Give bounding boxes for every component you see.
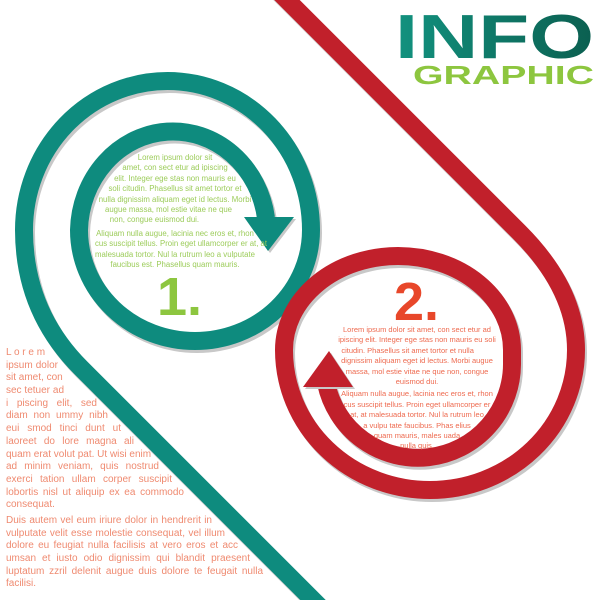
- left text block: vulputate velit esse molestie consequat, vel illum: [6, 528, 225, 539]
- text block 2: a vulpu tate faucibus. Phas elius: [363, 421, 471, 430]
- text block 2: Lorem ipsum dolor sit amet, con sect etur ad: [343, 325, 491, 334]
- title: GRAPHIC: [413, 60, 594, 90]
- left text block: diam non ummy nibh: [6, 410, 108, 421]
- left text block: sec tetuer ad: [6, 385, 64, 396]
- left text block: sit amet, con: [6, 372, 63, 383]
- text block 1: malesuada tortor. Nul la rutrum leo a vulputate: [95, 250, 255, 259]
- text block 1: Lorem ipsum dolor sit: [138, 153, 212, 162]
- text block 2: at, at malesuada tortor. Nul la rutrum leo: [350, 410, 484, 419]
- left text block: consequat.: [6, 499, 55, 510]
- left text block: [6, 347, 264, 589]
- left text block: i piscing elit, sed: [6, 398, 97, 409]
- text block 2: citudin. Phasellus sit amet tortor et nulla: [341, 346, 474, 355]
- text block 2: nulla quis.: [400, 441, 434, 450]
- text block 1: faucibus est. Phasellus quam mauris.: [110, 260, 240, 269]
- left text block: dolore eu feugiat nulla facilisis at vero eros et acc: [6, 540, 238, 551]
- teal spiral: [24, 81, 332, 600]
- text block 1: soli citudin. Phasellus sit amet tortor et: [108, 184, 242, 193]
- text block 1: cus suscipit tellus. Proin eget ullamcorper er at, at: [95, 239, 267, 248]
- text block 2: euismod dui. Aliquam nulla augue, lacinia nec eros et, rhon: [341, 377, 493, 398]
- text block 2: [338, 325, 496, 450]
- red spiral: [270, 0, 578, 493]
- text block 1: nulla dignissim aliquam eget id lectus. Morbi: [99, 195, 251, 204]
- title: INFO: [395, 3, 594, 72]
- left text block: umsan et iusto odio dignissim qui blandit praesent: [6, 553, 250, 564]
- left text block: lobortis nisl ut aliquip ex ea commodo: [6, 487, 184, 498]
- left text block: ad minim veniam, quis nostrud: [6, 461, 159, 472]
- text block 1: [95, 153, 267, 269]
- title: [395, 3, 594, 90]
- text block 1: elit. Integer ege stas non mauris eu: [114, 174, 236, 183]
- text block 1: augue massa, mol estie vitae ne que: [105, 205, 232, 214]
- left text block: facilisi.: [6, 578, 36, 589]
- number 1: 1.: [157, 267, 202, 327]
- text block 1: non, congue euismod dui. Aliquam nulla augue, lacinia nec eros et, rhon: [96, 215, 254, 238]
- left text block: luptatum zzril delenit augue duis dolore te feugait nulla: [6, 566, 263, 577]
- left text block: Duis autem vel eum iriure dolor in hendrerit in: [6, 515, 212, 526]
- text block 2: quam mauris, males uada: [374, 431, 460, 440]
- text block 2: dignissim aliquam eget id lectus. Morbi augue: [341, 356, 493, 365]
- number 2: 2.: [394, 272, 439, 332]
- text block 2: massa, mol estie vitae ne que non, congue: [346, 367, 488, 376]
- text block 2: ipiscing elit. Integer ege stas non mauris eu soli: [338, 335, 496, 344]
- left text block: L o r e m: [6, 347, 45, 358]
- text block 2: cus suscipit tellus. Proin eget ullamcorper er: [344, 400, 490, 409]
- left text block: exerci tation ullam corper suscipit: [6, 474, 172, 485]
- text block 1: amet, con sect etur ad ipiscing: [122, 163, 228, 172]
- left text block: laoreet do lore magna ali: [6, 436, 134, 447]
- left text block: quam erat volut pat. Ut wisi enim: [6, 448, 151, 460]
- left text block: ipsum dolor: [6, 360, 58, 371]
- left text block: eui smod tinci dunt ut: [6, 423, 121, 434]
